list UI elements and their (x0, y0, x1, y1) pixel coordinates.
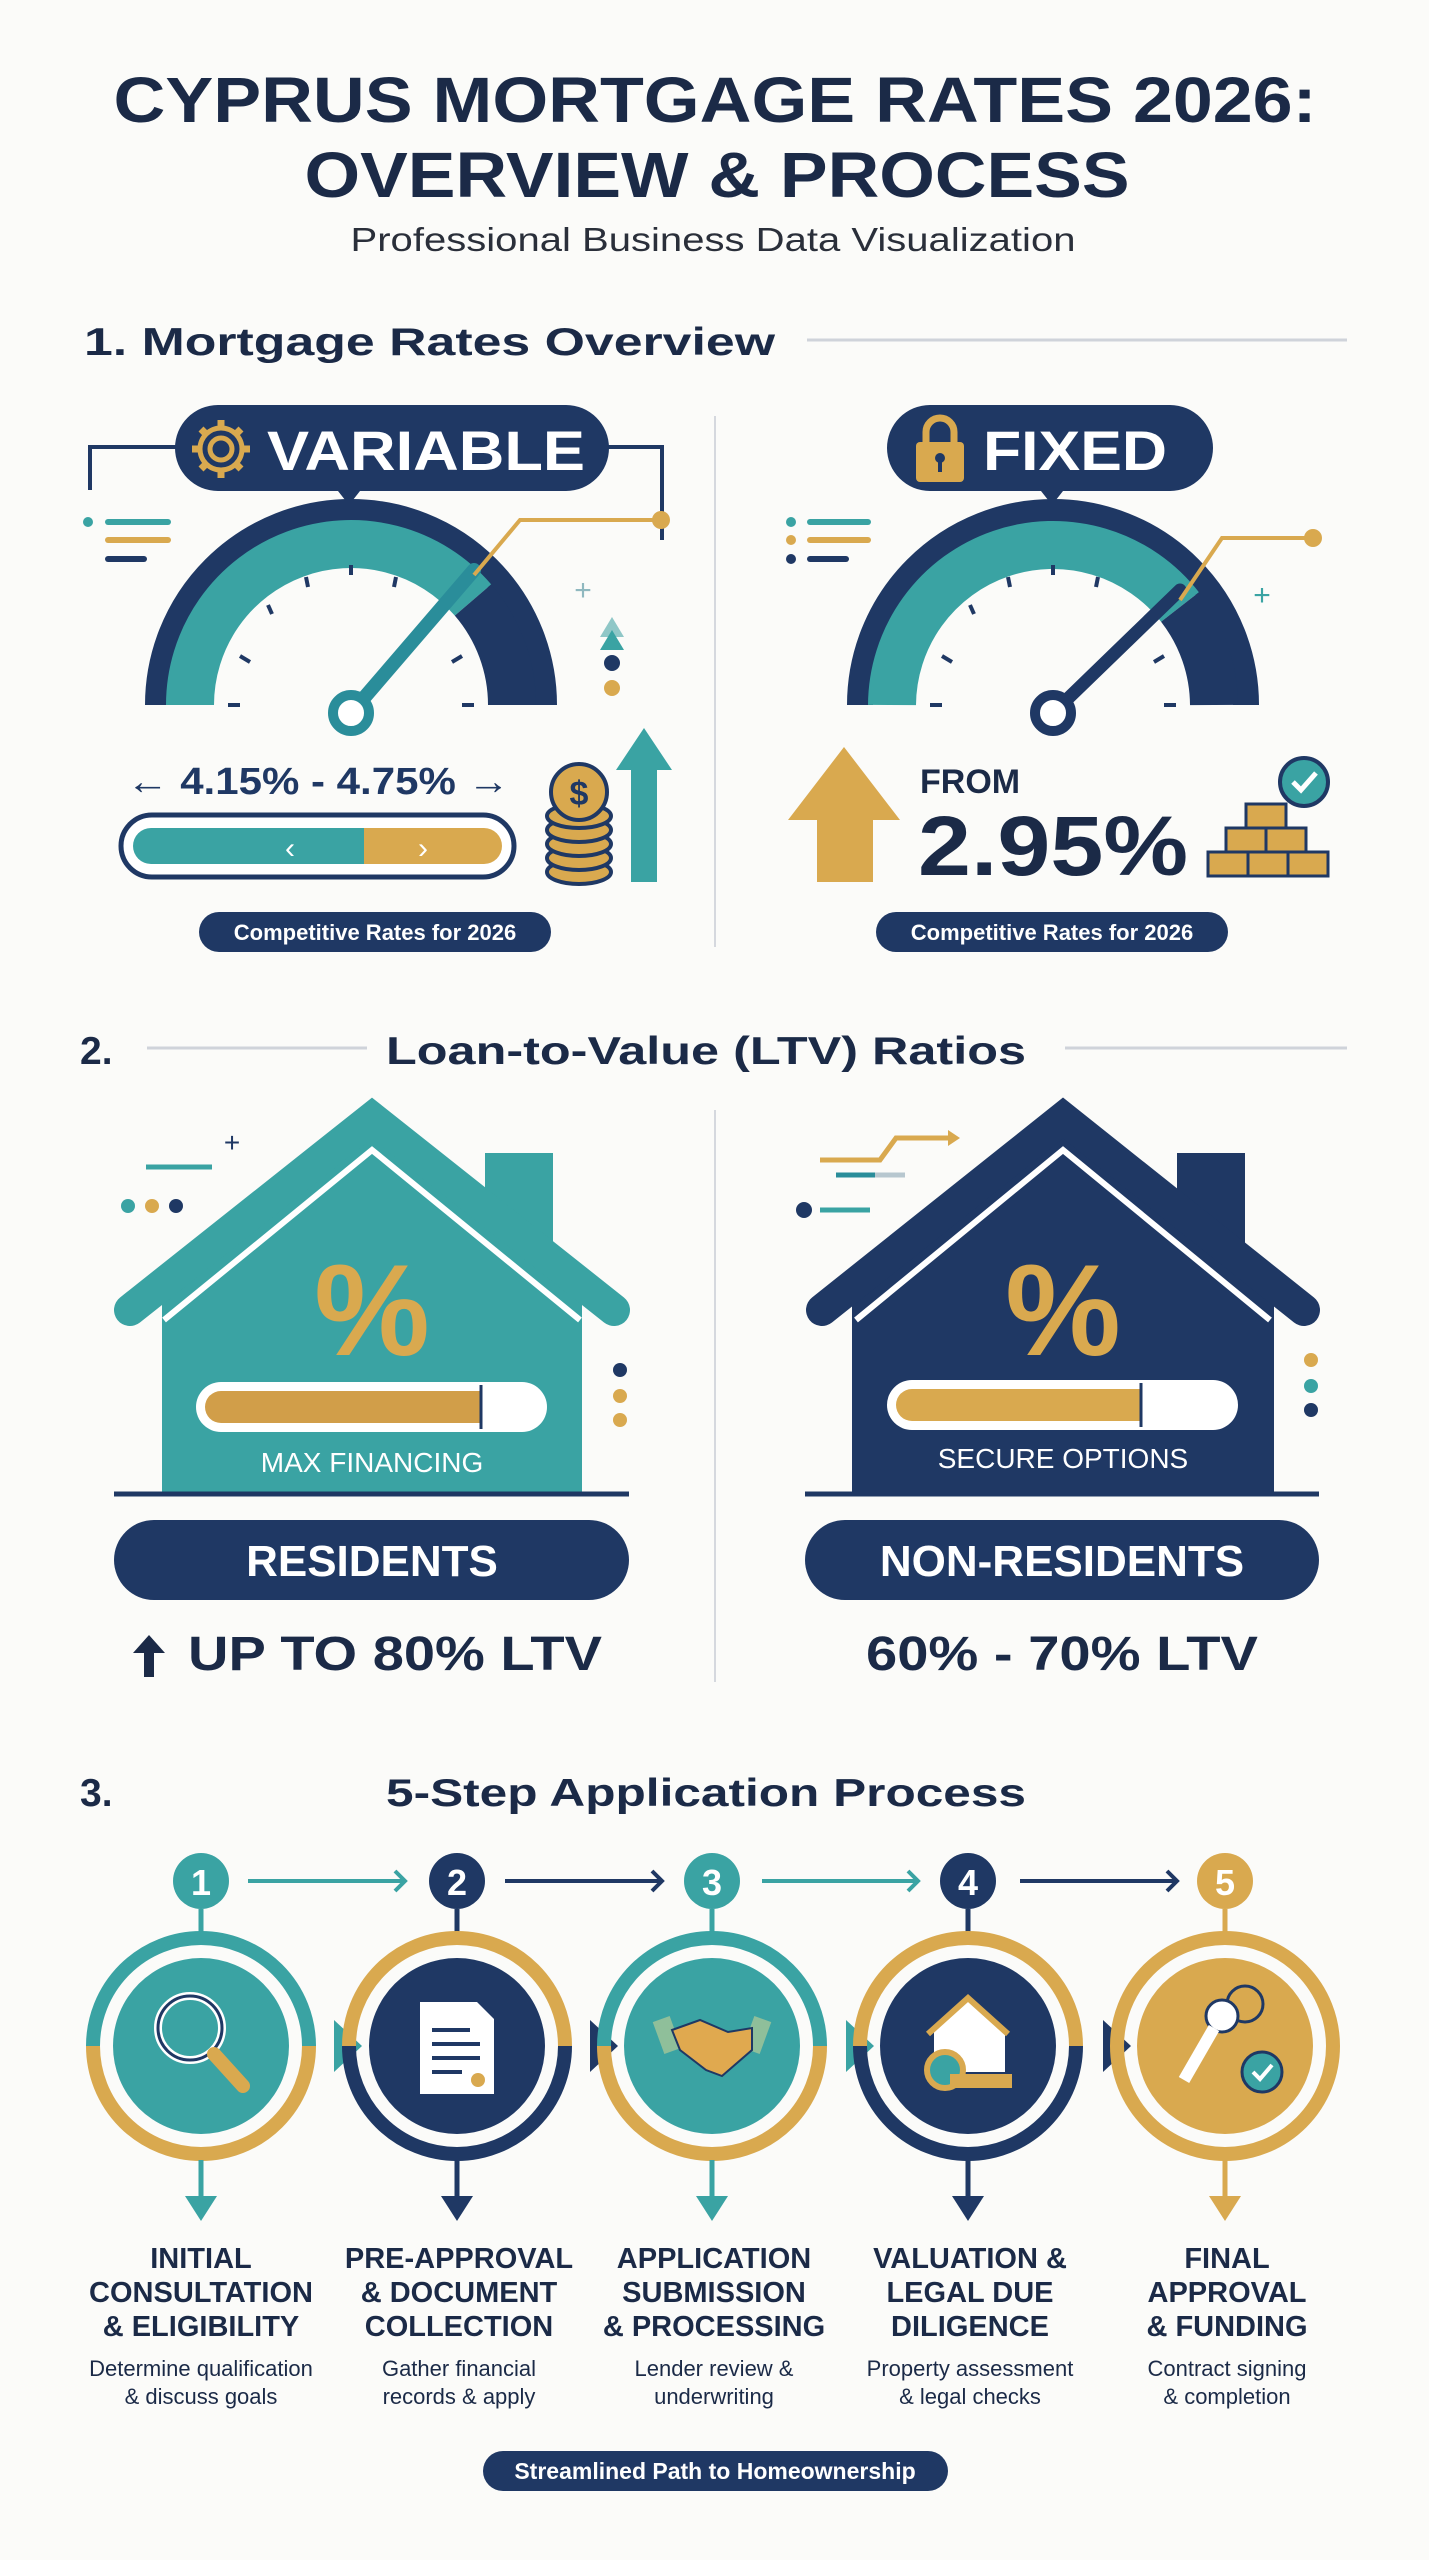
decor (796, 1130, 1318, 1417)
chevron (846, 2020, 874, 2072)
title: CYPRUS MORTGAGE RATES 2026: (114, 64, 1316, 136)
icon: teal house: MAX FINANCING (261, 1447, 483, 1478)
step 2: & DOCUMENT (361, 2277, 558, 2309)
residents pill (114, 1520, 629, 1600)
slider bar: ‹ (285, 832, 295, 865)
icon: coins (547, 764, 611, 884)
gauge (158, 511, 670, 731)
non-residents ltv: 60% - 70% LTV (866, 1628, 1258, 1681)
step 4: DILIGENCE (891, 2311, 1049, 2343)
icon: magnifier (158, 1996, 243, 2086)
step 2 (345, 1853, 573, 2409)
step 3: Lender review & (635, 2356, 794, 2381)
badge: competitive rates: Competitive Rates for 2026 (234, 920, 516, 945)
icon: navy house: % (1005, 1237, 1121, 1383)
step 3: & PROCESSING (603, 2311, 825, 2343)
from rate: FROM (920, 763, 1020, 801)
decor: + (224, 1127, 240, 1158)
residents pill: RESIDENTS (246, 1537, 498, 1586)
step 4 (860, 1853, 1076, 2409)
legend lines (83, 517, 168, 559)
step 1: INITIAL (150, 2243, 252, 2275)
step 2: COLLECTION (365, 2311, 553, 2343)
badge: competitive rates (876, 912, 1228, 952)
step 1: & ELIGIBILITY (103, 2311, 299, 2343)
slider bar: › (418, 832, 428, 865)
step 4: Property assessment (867, 2356, 1073, 2381)
step 4: & legal checks (899, 2384, 1041, 2409)
title (114, 64, 1316, 211)
step 3: underwriting (654, 2384, 774, 2409)
icon: teal house: % (314, 1237, 430, 1383)
panel: variable rate (83, 405, 672, 952)
step 5: FINAL (1184, 2243, 1270, 2275)
chevron (1103, 2020, 1131, 2072)
section 2 heading: Loan-to-Value (LTV) Ratios (386, 1030, 1026, 1073)
range label: ← 4.15% - 4.75% → (126, 761, 510, 803)
arrow: teal up (616, 728, 672, 882)
icon: teal house (114, 1118, 629, 1494)
chevron (334, 2020, 362, 2072)
fixed pill (887, 405, 1213, 505)
step 1: Determine qualification (89, 2356, 313, 2381)
connector lines (90, 447, 662, 540)
step 5: APPROVAL (1148, 2277, 1306, 2309)
non-residents pill (805, 1520, 1319, 1600)
panel: fixed rate (786, 405, 1328, 952)
step 2: 2 (447, 1862, 467, 1903)
arrow: gold up (788, 747, 900, 882)
panel: non-residents (796, 1118, 1319, 1681)
variable pill (175, 405, 609, 505)
step 3 (603, 1853, 825, 2409)
step 2: records & apply (383, 2384, 535, 2409)
section 3 heading (80, 1772, 1026, 1815)
icon: padlock (916, 418, 964, 482)
step 4: LEGAL DUE (886, 2277, 1054, 2309)
slider bar (121, 815, 514, 877)
decor (121, 1127, 627, 1427)
icon: house and tape (927, 1998, 1012, 2088)
footer badge (483, 2451, 948, 2491)
icon: handshake (653, 2016, 771, 2076)
step 4: 4 (958, 1862, 978, 1903)
step 5: & completion (1163, 2384, 1291, 2409)
subtitle: Professional Business Data Visualization (350, 221, 1076, 258)
step 2: PRE-APPROVAL (345, 2243, 573, 2275)
residents ltv: UP TO 80% LTV (188, 1628, 602, 1681)
step 5: & FUNDING (1146, 2311, 1308, 2343)
section 2 heading (80, 1030, 1347, 1073)
step 5 (1117, 1853, 1333, 2409)
from rate (918, 763, 1188, 893)
from rate: 2.95% (918, 799, 1188, 893)
variable pill: VARIABLE (267, 419, 585, 482)
icon: gold bars with check (1208, 758, 1328, 876)
icon: coins: $ (570, 775, 589, 813)
step 1 (89, 1853, 313, 2409)
step 3: APPLICATION (617, 2243, 811, 2275)
step 2: Gather financial (382, 2356, 536, 2381)
gauge: + (1253, 579, 1271, 612)
process steps (89, 1853, 1333, 2409)
badge: competitive rates: Competitive Rates for 2026 (911, 920, 1193, 945)
icon: gear (192, 420, 250, 478)
badge: competitive rates (199, 912, 551, 952)
chevron (590, 2020, 618, 2072)
decor: + (574, 574, 592, 607)
panel: residents (114, 1118, 629, 1681)
step 1: & discuss goals (125, 2384, 277, 2409)
section 3 heading: 3. (80, 1772, 113, 1815)
icon: key and check (1184, 1986, 1282, 2092)
step 4: VALUATION & (873, 2243, 1067, 2275)
step 5: Contract signing (1148, 2356, 1306, 2381)
footer badge: Streamlined Path to Homeownership (514, 2458, 916, 2484)
icon: document (420, 2002, 494, 2094)
title: OVERVIEW & PROCESS (304, 139, 1130, 211)
legend lines (786, 517, 868, 564)
section 2 heading: 2. (80, 1030, 113, 1073)
step 1: CONSULTATION (89, 2277, 313, 2309)
top arrows (248, 1871, 1177, 1891)
decor (574, 574, 624, 696)
section 1 heading: 1. Mortgage Rates Overview (84, 321, 776, 364)
fixed pill: FIXED (983, 419, 1167, 482)
icon: navy house (805, 1118, 1319, 1494)
step 5: 5 (1215, 1862, 1235, 1903)
gauge (860, 512, 1322, 731)
step 1: 1 (191, 1862, 211, 1903)
icon: navy house: SECURE OPTIONS (938, 1443, 1188, 1474)
section 3 heading: 5-Step Application Process (386, 1772, 1026, 1815)
step 3: SUBMISSION (622, 2277, 806, 2309)
non-residents pill: NON-RESIDENTS (880, 1537, 1244, 1586)
step 3: 3 (702, 1862, 722, 1903)
